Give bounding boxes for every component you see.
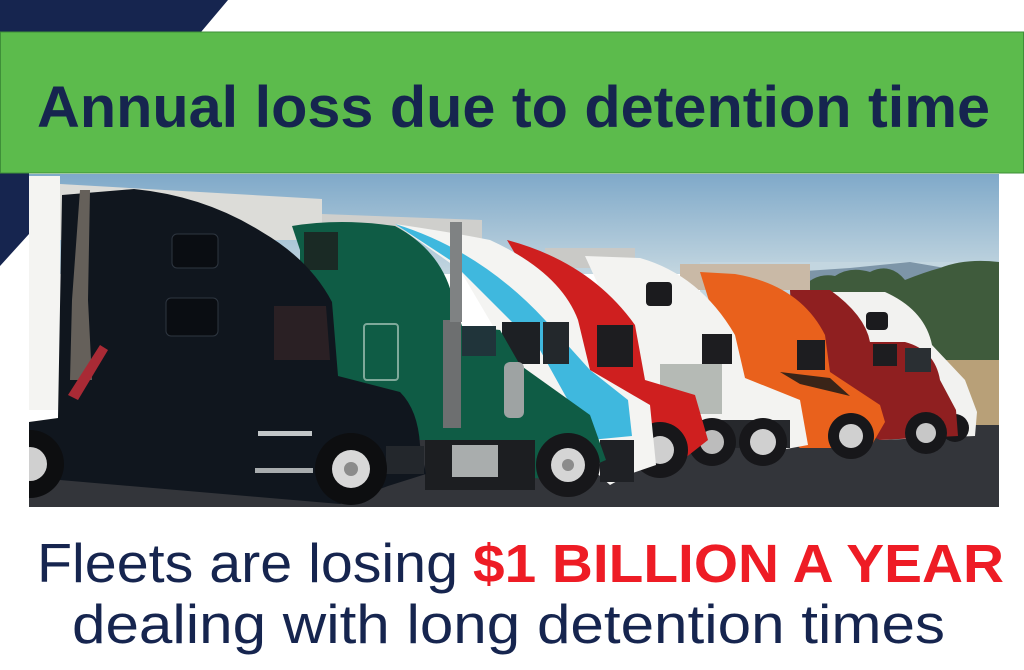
caption highlight: $1 BILLION A YEAR xyxy=(473,534,1004,594)
sky xyxy=(29,174,999,274)
white mask left of photo edge xyxy=(0,266,29,516)
caption line 1: Fleets are losing xyxy=(37,532,458,594)
distant hills and trees xyxy=(700,261,999,430)
truck: light blue and white xyxy=(395,224,656,485)
trailers behind xyxy=(29,176,810,410)
truck: white middle xyxy=(585,256,808,466)
corner shape: navy left xyxy=(0,172,29,266)
caption line 2: dealing with long detention times xyxy=(72,593,945,655)
pavement xyxy=(29,425,999,507)
photo: row of parked trucks xyxy=(0,174,999,507)
truck: black, foreground xyxy=(0,189,426,505)
truck: maroon xyxy=(790,290,958,454)
truck: orange xyxy=(700,272,885,459)
truck: green xyxy=(292,222,606,497)
title text: Annual loss due to detention time xyxy=(37,75,990,140)
title banner xyxy=(0,32,1024,173)
truck: white, far right xyxy=(830,292,977,442)
caption xyxy=(37,532,1004,655)
truck: red xyxy=(507,240,708,478)
corner shape: navy top xyxy=(0,0,228,32)
